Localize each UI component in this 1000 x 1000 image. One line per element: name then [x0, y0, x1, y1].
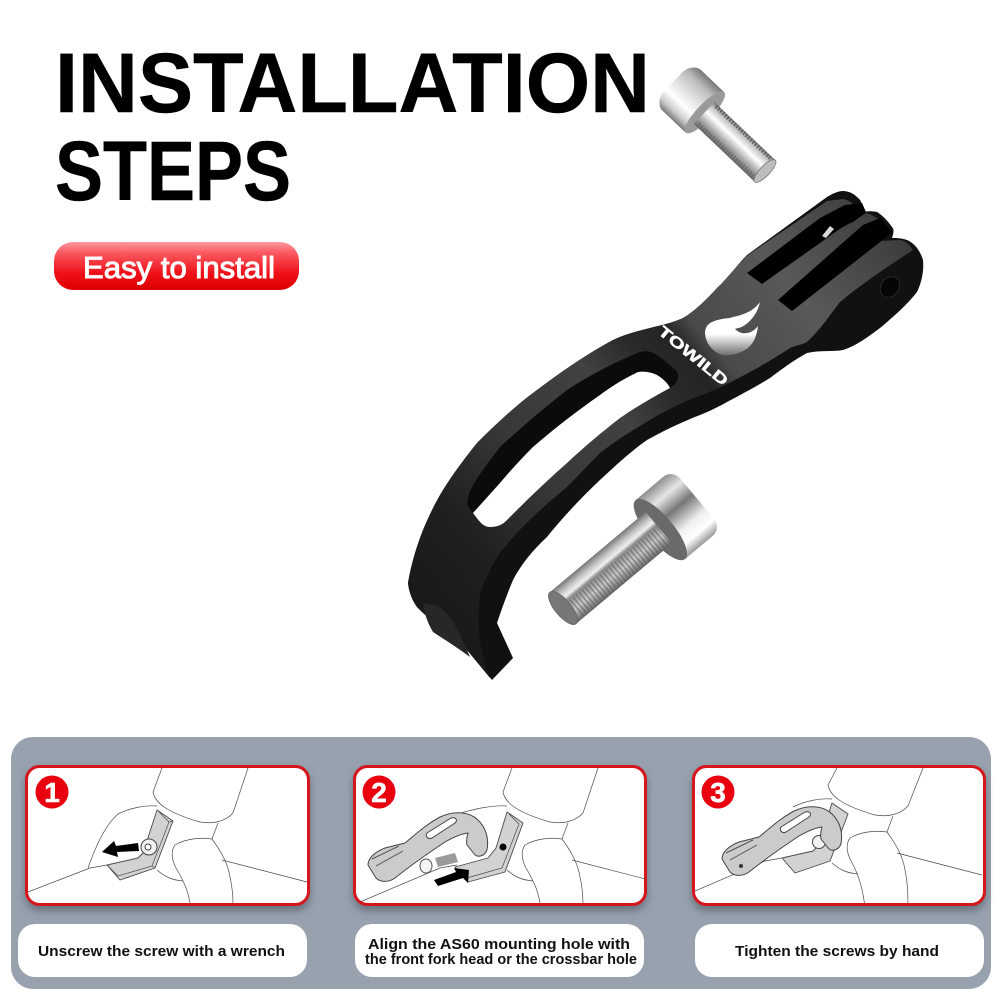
mini mount [722, 807, 842, 875]
caption 2: the front fork head or the crossbar hole [365, 951, 637, 968]
product: bracket arm [408, 191, 923, 680]
step 3 illustration [695, 768, 982, 908]
panel: steps [11, 737, 991, 989]
badge: easy to install: Easy to install [83, 250, 275, 285]
mini mount [368, 813, 488, 881]
badge: easy to install [54, 242, 299, 290]
title: STEPS [55, 124, 291, 218]
caption 3: Tighten the screws by hand [735, 943, 939, 960]
slit highlight [822, 226, 834, 238]
step 1 number [36, 776, 68, 808]
step 1 illustration [28, 768, 307, 903]
arm slot inner wall [467, 351, 678, 513]
title: INSTALLATION [55, 36, 650, 130]
arm slot opening [473, 372, 670, 527]
caption 2: Align the AS60 mounting hole with [368, 936, 630, 953]
logo text: TOWILD [654, 323, 731, 390]
caption 1: Unscrew the screw with a wrench [38, 943, 285, 960]
caption 1 [18, 924, 307, 977]
caption 2 [355, 924, 644, 977]
mini bolt [420, 853, 458, 873]
mount slit 1 [747, 203, 866, 284]
icon: top bolt [654, 62, 789, 194]
step 1 card [26, 766, 308, 904]
caption 3 [695, 924, 984, 977]
step 2 card [354, 766, 657, 904]
icon: bottom bolt [534, 469, 722, 645]
step 3 number [702, 776, 734, 808]
arrow [102, 841, 139, 857]
step 3 number: 3 [710, 777, 726, 808]
step 2 illustration [360, 768, 657, 903]
arrow [434, 868, 469, 886]
side hole at bracket foot [423, 603, 470, 657]
mount slit 2 [778, 218, 892, 311]
step 2 number: 2 [371, 777, 387, 808]
pivot hole [876, 273, 904, 301]
flame logo [705, 302, 760, 355]
step 2 number [362, 776, 396, 808]
top face of bracket [408, 199, 913, 678]
title [55, 36, 650, 218]
step 1 number: 1 [44, 777, 60, 808]
step 3 card [694, 766, 984, 908]
